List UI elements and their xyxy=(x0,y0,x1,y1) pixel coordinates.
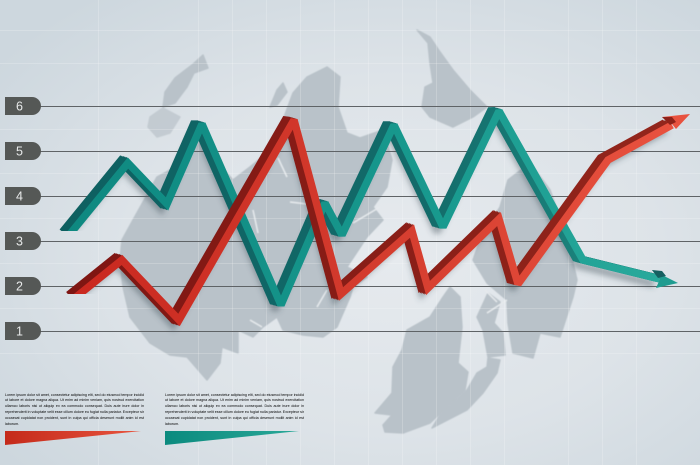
label 1: 1 xyxy=(16,324,23,338)
red line series xyxy=(68,118,672,325)
scale labels 1 to 6 xyxy=(5,97,41,340)
label 5 xyxy=(5,142,41,160)
text block: right: occaecat cupidatat non proident, sunt in culpa qui officia deserunt mollit anim id est xyxy=(165,416,304,420)
text block: left: occaecat cupidatat non proident, sunt in culpa qui officia deserunt mollit anim id est xyxy=(5,416,144,420)
text block: left: ullamco laboris nisi ut aliquip ex ea commodo consequat. Duis aute irure dolor in xyxy=(5,404,144,408)
text block: left xyxy=(5,392,144,426)
teal shadow xyxy=(64,116,654,310)
label 3: 3 xyxy=(16,234,23,248)
text block: right: ut labore et dolore magna aliqua. Ut enim ad minim veniam, quis nostrud exercitation xyxy=(165,398,304,402)
label 4: 4 xyxy=(16,190,23,204)
teal line series xyxy=(62,109,660,310)
text block: left: ut labore et dolore magna aliqua. Ut enim ad minim veniam, quis nostrud exercitation xyxy=(5,398,144,402)
label 4 xyxy=(5,187,41,205)
label 6: 6 xyxy=(16,100,23,114)
world map silhouette xyxy=(120,30,577,433)
label 2 xyxy=(5,277,41,295)
legend bar: red xyxy=(5,431,141,445)
label 6 xyxy=(5,97,41,115)
label 5: 5 xyxy=(16,144,23,158)
red extruded side xyxy=(68,118,670,320)
red arrowhead xyxy=(662,114,690,129)
teal extruded side xyxy=(62,109,658,305)
label 2: 2 xyxy=(16,280,23,294)
text block: left: reprehenderit in voluptate velit esse cillum dolore eu fugiat nulla pariatur. Excepteur sint xyxy=(5,410,144,414)
text block: right: laborum. xyxy=(165,422,179,426)
text block: right: ullamco laboris nisi ut aliquip ex ea commodo consequat. Duis aute irure dolor in xyxy=(165,404,304,408)
red shadow xyxy=(70,125,666,325)
legend bar: teal xyxy=(165,431,299,445)
text block: left: laborum. xyxy=(5,422,19,426)
teal arrowhead xyxy=(652,270,678,288)
red front face xyxy=(76,120,672,320)
text block: right: reprehenderit in voluptate velit esse cillum dolore eu fugiat nulla pariatur. Excepteur sint xyxy=(165,410,304,414)
label 3 xyxy=(5,232,41,250)
label 1 xyxy=(5,322,41,340)
text block: right xyxy=(165,392,304,426)
teal front face xyxy=(70,111,660,305)
horizontal scale lines xyxy=(40,106,700,332)
